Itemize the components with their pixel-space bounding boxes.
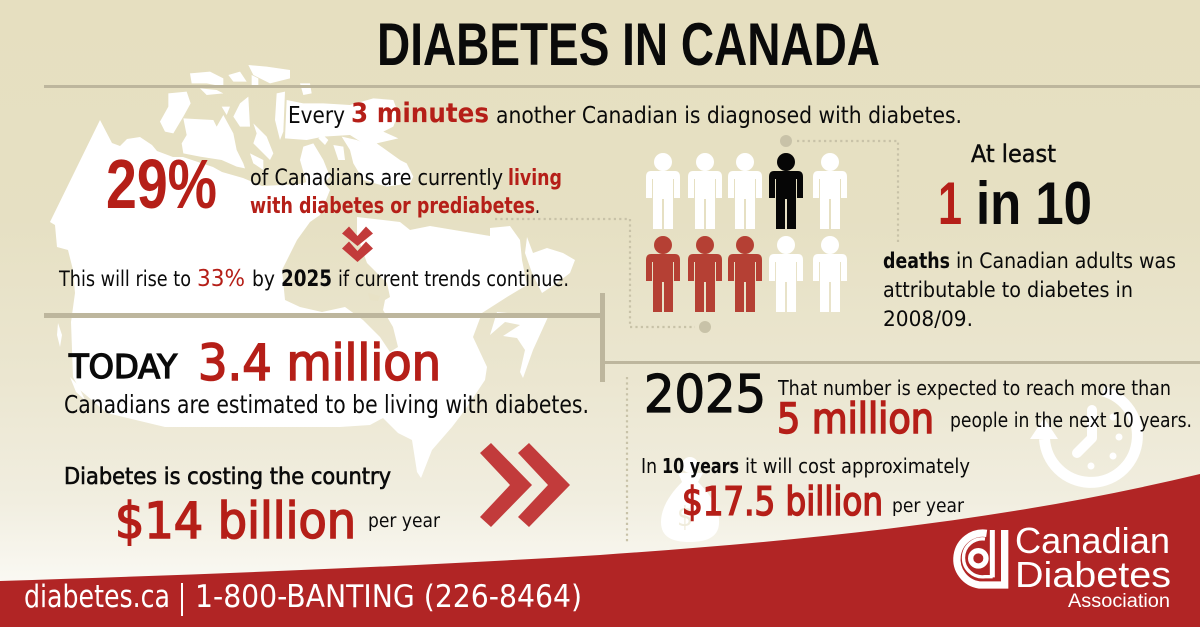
stat: 1 in 10: in 10 (976, 170, 1092, 237)
headline: every 3 minutes: another Canadian is diagnosed with diabetes. (496, 103, 962, 129)
logo mark (957, 530, 1005, 585)
pictogram: bottom row of people (646, 236, 847, 312)
stat: today 3.4 million: 3.4 million (198, 334, 441, 392)
text: 29% description: with diabetes or prediabetes (250, 194, 535, 219)
stat: 1 in 10: 1 (938, 170, 962, 237)
headline: every 3 minutes: Every (288, 103, 345, 129)
stat: 5 million: 5 million (777, 394, 934, 443)
logo: Canadian Diabetes Association (957, 520, 1171, 612)
text: rise to 33%: by (252, 267, 275, 291)
text: costing the country: Diabetes is costing the country (64, 464, 391, 490)
text: per year: per year (892, 495, 965, 517)
text: in 10 years cost: 10 years (662, 454, 739, 478)
text: in 10 years cost: In (641, 454, 657, 478)
map: arctic islands (160, 65, 413, 187)
text: canadians estimated: Canadians are estimated to be living with diabetes. (64, 390, 589, 419)
text: 29% description (250, 166, 562, 219)
stat: today 3.4 million: TODAY (68, 347, 178, 386)
logo: Canadian Diabetes Association: Canadian (1015, 520, 1170, 561)
stat: 1 in 10 (938, 170, 1092, 237)
icon: double chevron down (342, 226, 373, 262)
stat: today 3.4 million (68, 334, 441, 392)
text: deaths description (883, 249, 1176, 331)
text: 29% description: of Canadians are currently (250, 166, 503, 191)
text: rise to 33%: if current trends continue. (338, 267, 569, 291)
icon: money bag (661, 457, 719, 542)
headline: every 3 minutes (288, 98, 962, 129)
text: deaths description: deaths (883, 249, 950, 273)
icon: double chevron right (480, 443, 570, 527)
footer contact text: 1-800-BANTING (226-8464) (195, 579, 582, 615)
text: people next 10 years: people in the next 10 years. (950, 408, 1192, 432)
text: in 10 years cost (641, 454, 970, 478)
icon: money bag: $ (677, 500, 693, 533)
text: deaths description: 2008/09. (883, 307, 973, 331)
footer contact text (24, 579, 582, 616)
text: deaths description: in Canadian adults was (956, 249, 1176, 273)
text: in 10 years cost: it will cost approximately (745, 454, 970, 478)
text: number expected: That number is expected to reach more than (777, 376, 1171, 400)
dotted connectors (495, 135, 898, 543)
text: at least: At least (971, 140, 1056, 168)
pictogram: top row of people (646, 153, 847, 229)
stat: $17.5 billion: $17.5 billion (682, 480, 883, 525)
text: per year: per year (368, 510, 441, 532)
text: 29% description: . (535, 194, 540, 219)
text: 29% description: living (508, 166, 562, 191)
text: rise to 33%: This will rise to (58, 267, 191, 291)
text: rise to 33%: 2025 (281, 267, 332, 292)
text: rise to 33%: 33% (197, 266, 245, 292)
stat: $14 billion: $14 billion (115, 492, 356, 550)
title: DIABETES IN CANADA (377, 11, 880, 78)
stat: 29%: 29% (106, 145, 217, 223)
red footer band (0, 474, 1200, 627)
headline: every 3 minutes: 3 minutes (351, 98, 489, 129)
icon: clock with arrow (1030, 391, 1137, 482)
map of Canada (50, 65, 575, 478)
divider lines (44, 85, 1200, 382)
text: rise to 33% (58, 266, 569, 292)
text: deaths description: attributable to diabetes in (883, 278, 1133, 302)
logo: Canadian Diabetes Association: Diabetes (1015, 554, 1171, 595)
logo: Canadian Diabetes Association: Association (1068, 591, 1170, 612)
footer contact text: diabetes.ca (24, 579, 170, 615)
stat: 2025: 2025 (644, 365, 766, 425)
